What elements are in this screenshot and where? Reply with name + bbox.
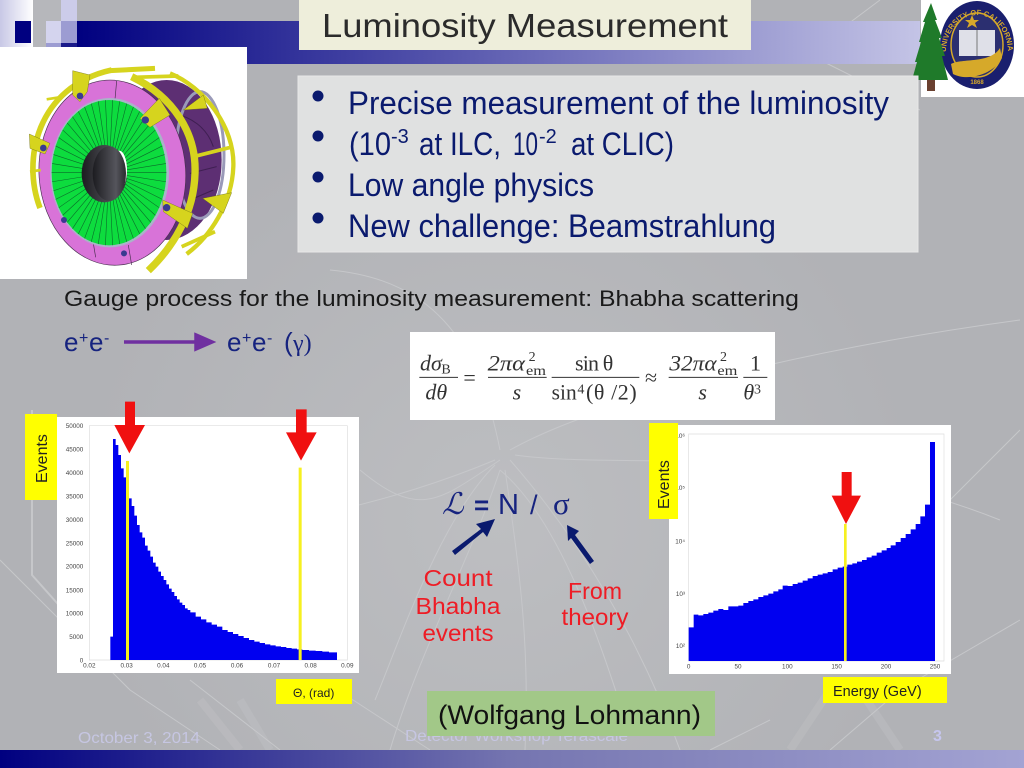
reaction equation: + [242,330,251,347]
purple detector body [112,80,224,240]
bullet 3: Low angle physics [348,167,594,203]
theta axis label [276,679,352,704]
cross-section formula: 32πα [668,350,717,375]
red arrows [114,402,317,461]
Events label right: Events [656,460,673,509]
red arrow [832,472,861,524]
x axis labels: 0.04 [157,662,170,669]
cross-section formula: dσ [420,350,443,375]
Events label left: Events [34,434,51,483]
x axis labels: 0 [687,664,691,671]
pink outer ring [33,75,192,270]
count Bhabha label [416,565,501,646]
cross-section formula: s [698,380,707,405]
reaction equation: - [267,330,272,347]
count Bhabha label: Count [424,565,493,591]
luminosity formula: N [498,489,519,521]
reaction equation: ( [284,327,293,357]
yellow support frame [30,68,233,271]
university logo: UNIVERSITY OF CALIFORNIA [941,10,1013,52]
bullet 2: -2 [539,126,557,148]
reaction arrow [124,335,212,349]
x axis labels: 0.09 [341,662,354,669]
cross-section formula: θ [743,380,754,405]
cross-section formula: = [463,365,476,390]
reaction equation [64,327,312,357]
cross-section formula: 2 [720,350,727,365]
cross-section formula: 2 [529,350,536,365]
reaction equation: e [89,327,103,357]
reaction equation: γ) [292,331,312,357]
y axis labels: 45000 [66,446,84,453]
plot frame [89,426,347,660]
page number: 3 [933,728,942,745]
attribution box: (Wolfgang Lohmann) [438,700,701,730]
arrow to N [452,519,495,555]
bullet list box [298,76,918,252]
y axis labels: 40000 [66,470,84,477]
from theory label: theory [562,604,629,630]
x axis labels: 0.08 [304,662,317,669]
cross-section formula: 2πα [488,350,526,375]
y axis labels: 10² [676,643,685,650]
angular distribution chart [57,402,359,673]
header gradient band [77,21,920,64]
x axis labels: 200 [881,664,892,671]
x axis labels [83,662,354,669]
bullet 2: -3 [391,126,409,148]
histogram bars [110,439,337,660]
y axis labels: 10⁴ [675,538,685,545]
x axis labels: 0.06 [231,662,244,669]
green sensor disc [50,98,169,247]
y axis labels: 10000 [66,611,84,618]
gauge process caption: Gauge process for the luminosity measurement: Bhabha scattering [64,286,799,311]
x axis labels: 150 [831,664,842,671]
bullet 2: 10 [513,126,538,162]
cross-section formula: em [717,364,737,379]
cross-section formula: dθ [425,380,447,405]
luminosity formula: = [474,490,489,520]
x axis labels: 50 [734,664,742,671]
x axis labels: 250 [930,664,941,671]
Events label right [649,423,678,519]
Events label left [25,414,57,500]
cross-section formula [410,332,775,420]
bullet 2: at CLIC) [571,126,674,162]
luminosity formula: σ [553,486,570,521]
luminosity formula: / [530,490,538,520]
from theory label: From [568,578,622,604]
reaction equation: e [64,327,78,357]
yellow cut line [844,524,847,661]
x axis labels: 0.03 [121,662,133,669]
cross-section formula: 4 [577,382,584,397]
energy axis label: Energy (GeV) [833,684,922,700]
count Bhabha label: Bhabha [416,593,501,619]
x axis labels: 0.02 [83,662,96,669]
cross-section formula: s [513,380,521,405]
y axis labels: 10³ [676,591,685,598]
cross-section formula: sin θ [575,350,613,375]
cross-section formula: 1 [750,350,761,375]
bullet 4: New challenge: Beamstrahlung [348,208,776,244]
title box [299,0,751,50]
x axis labels [687,664,941,671]
y axis labels: 5000 [69,634,84,641]
y axis labels: 35000 [66,493,84,500]
luminosity formula: ℒ [442,488,465,521]
bullet 1: Precise measurement of the luminosity [348,85,889,121]
footer event name: Detector Workshop Terascale [405,728,628,745]
arrow to sigma [567,525,594,564]
cross-section formula: sin [552,380,577,405]
footer date: October 3, 2014 [78,730,200,747]
x axis labels: 0.05 [194,662,207,669]
histogram bars [689,442,935,661]
bullet 2: at ILC, [419,126,501,162]
y axis labels: 30000 [66,517,84,524]
cross-section formula: em [526,364,546,379]
y axis labels: 50000 [66,423,84,430]
footer gradient band [0,750,1024,768]
y axis labels: 10⁶ [675,433,685,440]
bullet 2: (10 [349,126,391,162]
yellow cut lines [126,461,302,660]
cross-section formula: 3 [754,382,761,397]
attribution box [427,691,715,736]
reaction equation: + [79,330,88,347]
y axis labels: 0 [80,657,84,664]
y axis labels: 15000 [66,587,84,594]
y axis labels: 20000 [66,564,84,571]
title box: Luminosity Measurement [322,7,728,44]
from theory label [562,578,629,630]
y axis labels [675,433,685,650]
reaction equation: - [104,330,109,347]
energy axis label [823,677,947,703]
university logo: 1868 [970,80,984,86]
y axis labels: 10⁵ [675,485,685,492]
plot frame [689,434,944,661]
bullet 2 [312,126,674,162]
cross-section formula: (θ /2) [586,380,637,405]
energy distribution chart [669,425,951,674]
top-left decorative squares [0,0,77,47]
cross-section formula: ≈ [645,365,657,390]
luminosity formula [442,486,570,521]
theta axis label: Θ, (rad) [293,686,334,700]
y axis labels [66,423,84,664]
count Bhabha label: events [422,620,494,646]
y axis labels: 25000 [66,540,84,547]
cross-section formula: B [441,363,451,378]
x axis labels: 100 [782,664,793,671]
reaction equation: e [227,327,241,357]
reaction equation: e [252,327,266,357]
detector illustration panel [0,47,247,279]
university logo [913,0,1024,97]
x axis labels: 0.07 [268,662,281,669]
